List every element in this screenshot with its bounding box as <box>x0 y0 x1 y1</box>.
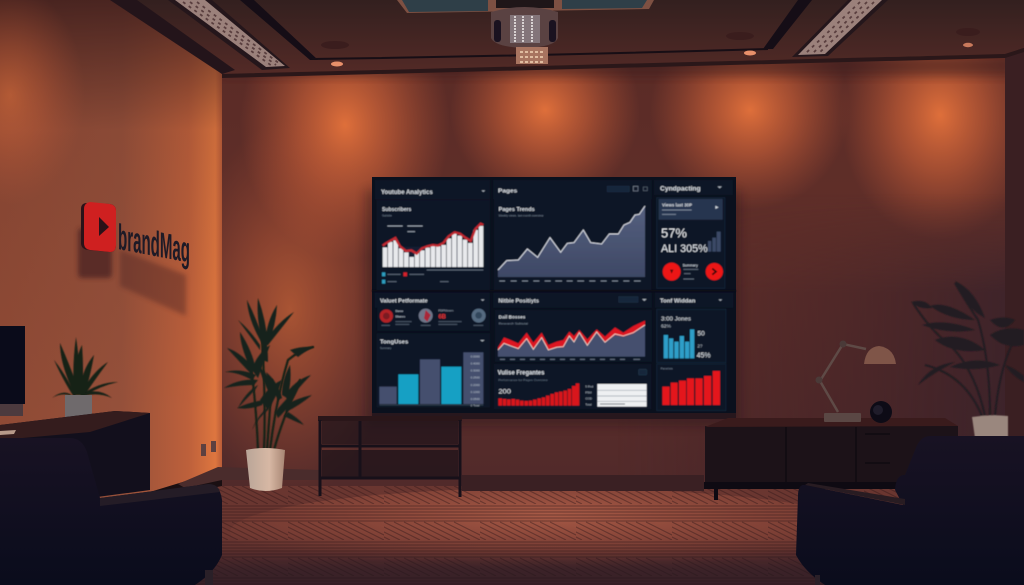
panel: tool widgets: 3:00 Jones <box>661 317 691 323</box>
panel: value progress: 200 <box>498 388 511 395</box>
icon: red circle next <box>706 263 723 280</box>
ceiling light strip left <box>168 0 290 70</box>
icon: red circle down <box>663 263 681 281</box>
floor plant pot <box>246 448 285 491</box>
panel: video performance: PDPMosen <box>438 308 454 312</box>
power outlets <box>201 441 216 456</box>
ceiling vent <box>397 0 654 13</box>
bar chart: topics <box>379 352 483 407</box>
panel: video performance: Shares <box>395 314 406 318</box>
panel: video analytics: Subscribers <box>382 207 411 213</box>
right floor plant <box>911 281 1024 438</box>
panel: video analytics <box>381 189 485 284</box>
bar chart: topics: 0.2500 <box>471 376 480 380</box>
area chart <box>498 206 645 277</box>
panel: pages area chart: Weekly views, last month overview <box>499 214 544 218</box>
panel: notable positions: Nitbie Positiyts <box>498 298 539 304</box>
panel: value progress: Performance for Pages Overview <box>498 378 549 382</box>
right armchair <box>796 436 1024 585</box>
panel: video performance: Valuet Petformate <box>380 298 428 304</box>
panel: topics bar chart: Summary <box>380 346 392 350</box>
center media shelf <box>318 416 462 497</box>
panel: engagement: Summary <box>683 263 698 267</box>
panel: notable positions: Research Subtotal <box>499 321 529 325</box>
brand sign <box>78 202 190 316</box>
panel: value progress <box>498 369 647 407</box>
table: white rows <box>585 384 647 407</box>
panel: tool widgets <box>660 298 722 405</box>
right wall column <box>1005 50 1024 450</box>
bar chart: topics: 0.0000 <box>471 354 480 358</box>
panel: tool widgets: 50 <box>697 331 705 338</box>
table: white rows: 5 Rsd <box>585 384 593 388</box>
ceiling light strip right <box>792 0 888 57</box>
back wall <box>222 54 1005 486</box>
dashboard screen <box>372 177 736 419</box>
bar chart: white bars with red line <box>382 224 483 284</box>
panel: video performance: 6B <box>438 314 447 320</box>
panel: video analytics: Youtube Analytics <box>381 189 433 196</box>
skirting board <box>178 467 704 491</box>
left wall <box>0 0 222 520</box>
panel: pages area chart: Pages Trends <box>499 207 535 213</box>
panel: notable positions: Dail Bosses <box>499 314 526 320</box>
bar chart: topics: 0.0500 <box>471 397 480 401</box>
panel: engagement <box>659 186 723 281</box>
logo play button <box>81 202 116 252</box>
left floor plant <box>224 298 314 491</box>
panel: engagement: 57% <box>661 226 687 240</box>
panel: tool widgets: 45% <box>697 353 711 360</box>
panel: engagement: Cyndpacting <box>660 186 701 192</box>
panel: topics bar chart <box>379 339 485 407</box>
table: white rows: P5M <box>585 390 592 394</box>
panel: tool widgets: 2? <box>697 343 703 348</box>
panel: tool widgets: 62% <box>661 324 672 330</box>
panel: video performance: Steve <box>395 309 404 313</box>
desk lamp <box>816 340 896 422</box>
bottom row of dashboard panels <box>372 290 736 411</box>
panel: notable positions <box>498 297 647 359</box>
panel: engagement: ALI 305% <box>661 243 708 255</box>
panel: topics bar chart: TongUses <box>380 339 408 345</box>
text: brandMag <box>118 216 190 271</box>
panel: video performance <box>380 298 486 325</box>
bar chart: blue bars <box>664 329 694 358</box>
panel: pages area chart: Pages <box>498 189 517 195</box>
table: white rows: Total <box>585 402 592 406</box>
panel: tool widgets: Panelists <box>661 366 673 370</box>
speaker <box>870 401 892 423</box>
right plant pot <box>972 415 1008 438</box>
floor <box>0 486 1024 585</box>
bar chart: red tall bars <box>662 371 720 405</box>
bar chart: topics: 0.4000 <box>471 361 480 365</box>
right credenza <box>704 418 958 500</box>
table: white rows: COD <box>585 396 593 400</box>
panel: value progress: Vulise Fregantes <box>498 371 545 377</box>
bar chart: topics: 0 Total <box>471 403 480 407</box>
panel: video analytics: Subtitle <box>382 214 392 218</box>
dashboard wall shadow <box>365 190 741 426</box>
desk plant pot <box>65 395 92 418</box>
panel: engagement: Views last 30P <box>662 203 692 208</box>
bar chart: topics: 0.1000 <box>471 390 480 394</box>
left armchair <box>0 438 222 585</box>
panel: pages area chart <box>498 186 647 281</box>
top row of dashboard panels <box>375 180 733 290</box>
bar chart: red bars <box>498 383 579 406</box>
panel: tool widgets: Tonf Widdan <box>660 298 696 304</box>
ceiling <box>110 0 1024 78</box>
projector <box>491 0 558 64</box>
left monitor <box>0 326 25 416</box>
bar chart: topics: 0.2000 <box>471 383 480 387</box>
bar chart: topics: 0.3000 <box>471 369 480 373</box>
left desk <box>0 411 150 510</box>
small desk plant <box>52 337 118 418</box>
line area chart: red <box>498 321 645 359</box>
